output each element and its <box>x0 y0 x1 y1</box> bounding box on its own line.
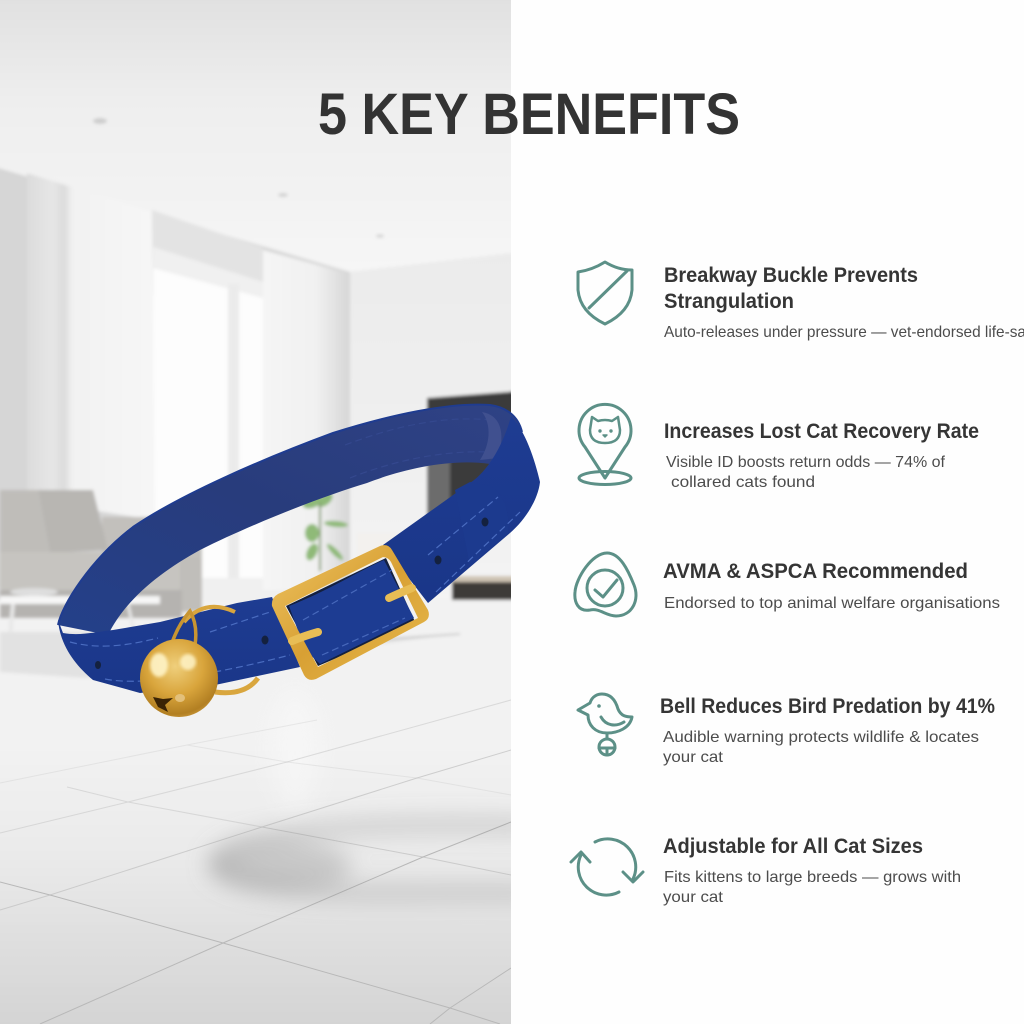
title: 5 KEY BENEFITS <box>318 82 740 147</box>
curtains <box>27 173 155 520</box>
benefit 1 <box>578 262 1024 341</box>
floor shadow <box>208 824 530 893</box>
rug <box>0 632 403 678</box>
collar photograph <box>58 405 540 717</box>
plant <box>301 490 348 571</box>
description: your cat <box>663 889 724 906</box>
description: Endorsed to top animal welfare organisations <box>664 595 1000 612</box>
collar inner back band <box>58 405 522 635</box>
heading: adjustable: Adjustable for All Cat Sizes <box>663 835 923 858</box>
collar front left strap <box>58 597 300 693</box>
bell <box>140 639 218 717</box>
tv <box>425 390 511 499</box>
icon: shield <box>578 262 632 324</box>
description: Audible warning protects wildlife & locates <box>663 729 979 746</box>
icon: badge with check <box>575 553 636 616</box>
heading: bell reduces predation: Bell Reduces Bird Predation by 41% <box>660 695 995 718</box>
ceiling <box>0 0 520 280</box>
panel: white benefits background <box>511 0 1024 1024</box>
collar front right strap <box>383 416 540 603</box>
icon: cat location pin <box>579 404 631 484</box>
buckle opening <box>286 558 416 666</box>
wall above window <box>153 212 262 280</box>
benefit 5 <box>571 835 961 906</box>
window <box>153 268 263 590</box>
side wall <box>0 167 350 610</box>
benefit 4 <box>578 694 995 766</box>
heading: breakaway buckle: Strangulation <box>664 290 794 313</box>
heading: recovery rate: Increases Lost Cat Recovery Rate <box>664 420 979 443</box>
icon: adjust arrows <box>571 839 643 895</box>
room upper part <box>0 0 520 1024</box>
collar loop keeper <box>455 482 508 566</box>
heading: AVMA and ASPCA: AVMA & ASPCA Recommended <box>663 560 968 583</box>
benefit 2 <box>579 404 979 491</box>
bell rings <box>215 678 258 693</box>
buckle <box>272 545 429 680</box>
console <box>357 533 427 603</box>
floor tile lines <box>0 700 511 1024</box>
coffee table <box>0 587 162 618</box>
benefit 3 <box>575 553 1000 616</box>
sofa <box>0 490 202 618</box>
floor <box>0 600 520 1024</box>
back wall <box>350 252 520 610</box>
description: Fits kittens to large breeds — grows with <box>664 869 961 886</box>
floor reflection <box>270 690 320 810</box>
panel: room photograph background <box>0 0 530 1024</box>
description: your cat <box>663 749 724 766</box>
icon: bird with bell <box>578 694 632 755</box>
heading: breakaway buckle: Breakway Buckle Prevents <box>664 264 918 287</box>
description: collared cats found <box>671 474 815 491</box>
strap in buckle <box>289 560 414 664</box>
description: Visible ID boosts return odds — 74% of <box>666 454 946 471</box>
ceiling lights <box>93 118 107 124</box>
